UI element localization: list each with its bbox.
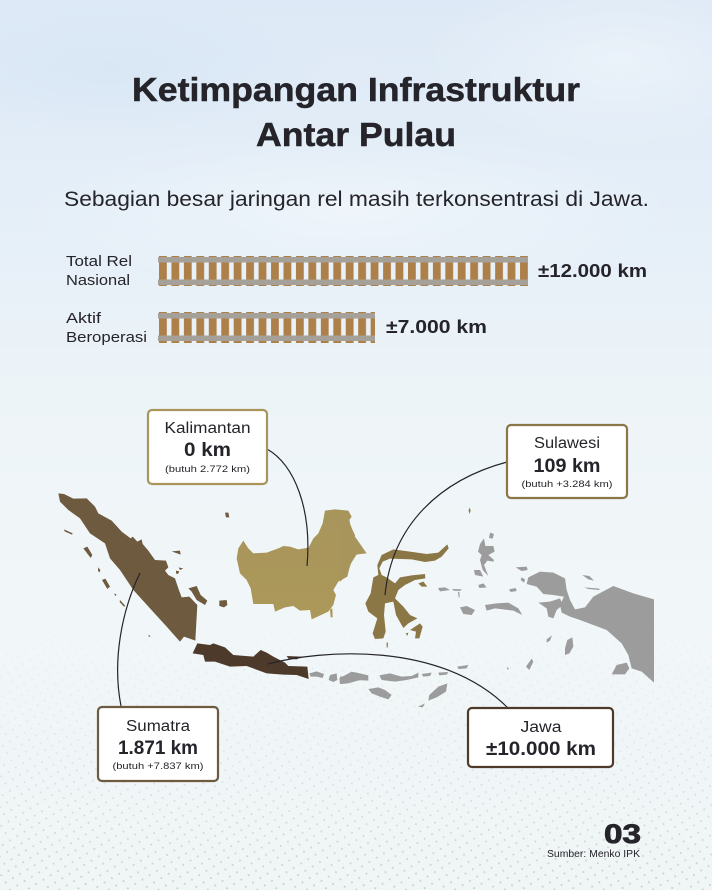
callout: sulawesi: Sulawesi — [534, 435, 600, 452]
subtitle: Sebagian besar jaringan rel masih terkonsentrasi di Jawa. — [64, 188, 649, 211]
callout: sulawesi: 109 km — [534, 456, 600, 477]
island: sulawesi — [365, 507, 471, 648]
callout: jawa: Jawa — [520, 719, 562, 736]
callout: jawa: ±10.000 km — [486, 739, 596, 760]
label: aktif — [66, 310, 147, 346]
callout: kalimantan — [148, 410, 267, 484]
rail: aktif — [158, 312, 375, 343]
page number: 03 — [604, 819, 641, 849]
title: Ketimpangan Infrastruktur — [132, 71, 580, 108]
callout: kalimantan: 0 km — [184, 440, 231, 461]
label: total rel — [66, 253, 132, 289]
islands: bali and lombok — [309, 671, 360, 684]
label: aktif: Beroperasi — [66, 329, 147, 346]
label: aktif: Aktif — [66, 310, 102, 327]
lesser sunda — [340, 672, 368, 684]
island: kalimantan east tip — [340, 510, 367, 582]
value: aktif: ±7.000 km — [386, 317, 487, 337]
connector: sulawesi — [385, 462, 507, 595]
callout: sulawesi: (butuh +3.284 km) — [522, 479, 612, 490]
source: Sumber: Menko IPK — [547, 849, 640, 860]
title — [132, 71, 580, 153]
island: sumatra — [58, 493, 229, 642]
callout: kalimantan: Kalimantan — [164, 420, 250, 437]
connector: kalimantan — [267, 449, 308, 566]
rail: total — [158, 256, 528, 286]
halmahera — [489, 533, 494, 539]
label: total rel: Total Rel — [66, 253, 132, 270]
callout: sumatra — [98, 707, 218, 781]
label: total rel: Nasional — [66, 272, 130, 289]
title: Antar Pulau — [256, 116, 456, 153]
callout: sumatra: 1.871 km — [118, 738, 198, 759]
callout: jawa — [468, 708, 613, 767]
callout: sumatra: (butuh +7.837 km) — [112, 761, 204, 772]
papua — [527, 572, 654, 683]
map of Indonesia — [58, 493, 654, 707]
callout: sulawesi — [507, 425, 627, 498]
value: total: ±12.000 km — [538, 261, 647, 281]
islands: eastern grey — [340, 533, 654, 707]
row: total rel nasional — [66, 253, 647, 289]
connector: sumatra — [118, 573, 140, 706]
maluku — [478, 583, 487, 588]
row: aktif beroperasi — [66, 310, 487, 346]
island: kalimantan — [237, 509, 360, 619]
callout: kalimantan: (butuh 2.772 km) — [165, 464, 250, 475]
connector: jawa — [268, 654, 508, 708]
callout: sumatra: Sumatra — [126, 718, 190, 735]
island: jawa — [193, 643, 309, 679]
